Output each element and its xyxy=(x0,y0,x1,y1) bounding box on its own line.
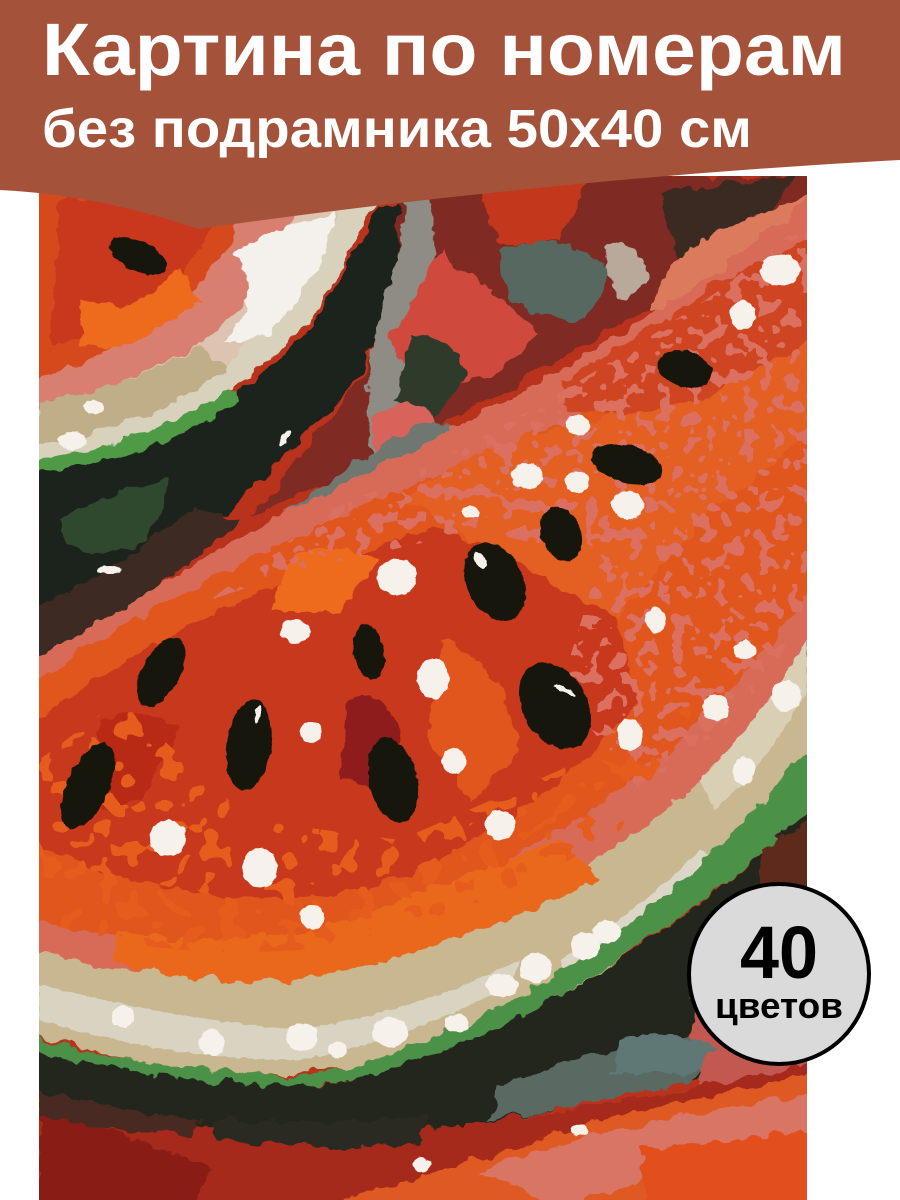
top centre background streaks xyxy=(250,176,820,540)
dark rind band, top left xyxy=(30,205,410,680)
badge: 40 colours xyxy=(689,884,869,1064)
badge: 40 colours: 40 xyxy=(740,911,818,994)
dark band under slice xyxy=(39,814,807,1131)
main slice: pale rind highlights xyxy=(39,640,807,1060)
watermelon seeds xyxy=(50,229,717,837)
pink speckle on upper right of slice xyxy=(210,220,807,790)
bottom slices xyxy=(20,1060,830,1200)
main slice: flesh xyxy=(20,180,830,981)
title xyxy=(42,8,846,159)
badge: 40 colours: цветов xyxy=(715,985,843,1026)
orange speckle across lower flesh xyxy=(39,700,700,952)
painting: watermelon slices xyxy=(20,170,830,1200)
top-left watermelon slice xyxy=(39,193,377,460)
top banner background xyxy=(0,0,900,229)
water droplets xyxy=(58,254,801,1172)
green rind edge, main slice xyxy=(39,754,807,1090)
subtitle: без подрамника 50х40 см xyxy=(42,99,752,159)
title: Картина по номерам xyxy=(42,8,846,91)
main slice: rind base xyxy=(20,180,830,1075)
